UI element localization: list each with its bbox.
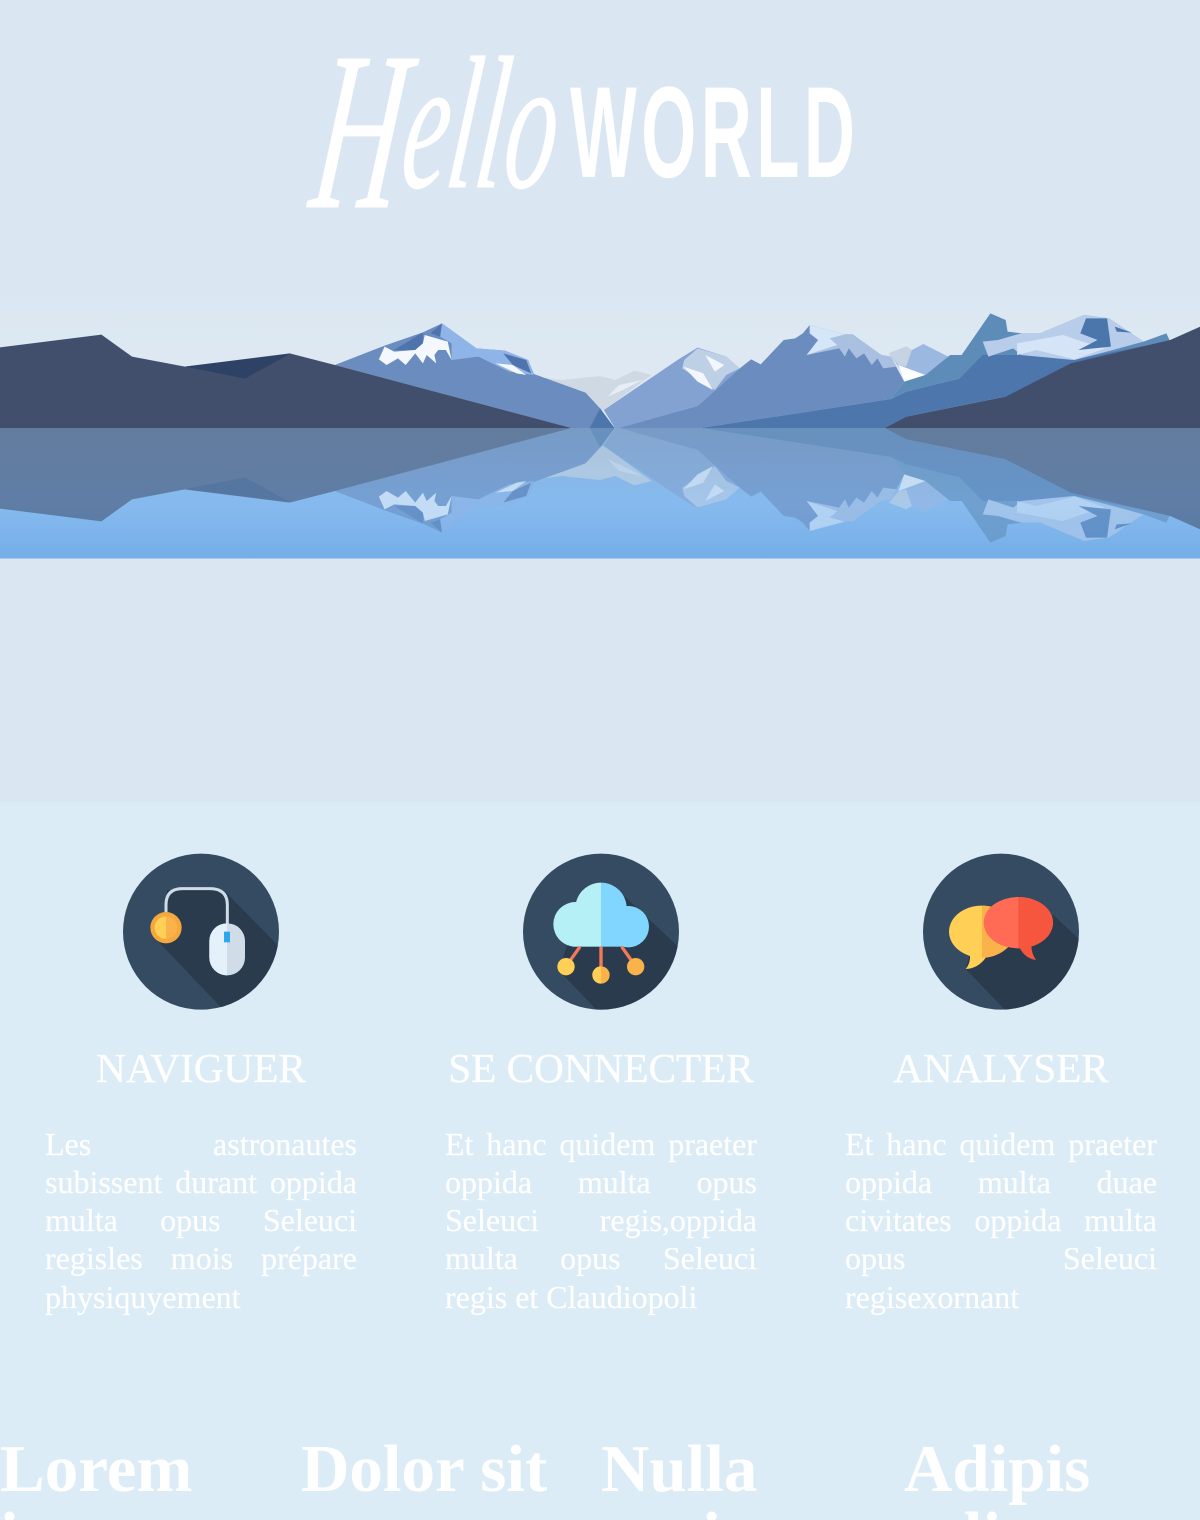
heading: analyser: ANALYSER bbox=[893, 1045, 1109, 1091]
bottom heading: dolor sit: Dolor sit bbox=[301, 1432, 547, 1506]
illustration: mountains reflected in a lake bbox=[0, 313, 1200, 558]
text block: analyser: Et hanc quidem praeter oppida multa duae civitates oppida multa opus Seleuci regisexornant bbox=[845, 1126, 1157, 1315]
icon: cloud network bbox=[523, 854, 679, 1010]
icon: mouse bbox=[123, 854, 279, 1010]
title: WORLD bbox=[570, 60, 859, 206]
title bbox=[300, 40, 859, 230]
bottom heading: nulla: Nulla bbox=[601, 1432, 757, 1506]
bottom heading: lorem: Lorem bbox=[0, 1432, 192, 1506]
icon: speech bubbles bbox=[923, 854, 1079, 1010]
panel: features background bbox=[0, 802, 1200, 1520]
bottom heading: adipis: Adipis bbox=[904, 1432, 1090, 1506]
heading: naviguer: NAVIGUER bbox=[96, 1045, 306, 1091]
text block: naviguer: Les astronautes subissent durant oppida multa opus Seleuci regisles mois prépare physiquyement bbox=[45, 1126, 357, 1315]
heading: se connecter: SE CONNECTER bbox=[448, 1045, 754, 1091]
text block: se connecter: Et hanc quidem praeter oppida multa opus Seleuci regis,oppida multa opus Seleuci regis et Claudiopoli bbox=[445, 1126, 757, 1315]
